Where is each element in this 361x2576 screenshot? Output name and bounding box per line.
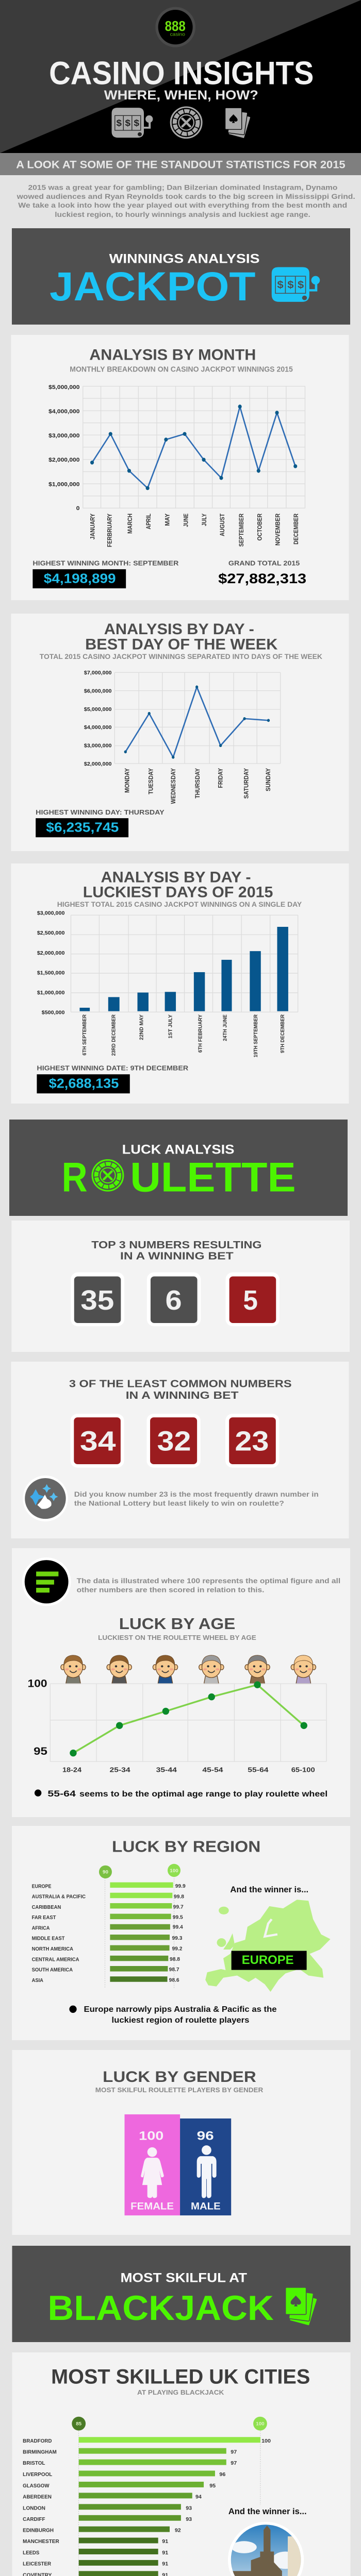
line chart: monthly winnings [48, 384, 305, 547]
line chart: monthly winnings: OCTOBER [256, 513, 264, 540]
panel: luck by region [12, 1826, 350, 2040]
bar chart: cities: EDINBURGH [23, 2528, 54, 2534]
bar chart: cities: BIRMINGHAM [23, 2450, 57, 2455]
icon: slot machine [112, 108, 153, 138]
text: data note [77, 1577, 340, 1594]
stat: highest winning date [37, 1064, 188, 1093]
bar chart: luckiest days: $1,000,000 [37, 990, 65, 996]
heading: ANALYSIS BY DAY - [101, 869, 251, 886]
line chart: monthly winnings: JANUARY [89, 514, 96, 539]
stat: highest winning date: $2,688,135 [49, 1076, 119, 1091]
chart: female column: FEMALE [130, 2201, 174, 2212]
panel: luckiest days [11, 863, 349, 1104]
bar chart: cities: 94 [195, 2495, 202, 2500]
line chart: monthly winnings: APRIL [145, 514, 152, 529]
heading: roulette: R [62, 1154, 88, 1200]
bar chart: regions: EUROPE [32, 1884, 52, 1889]
heading [85, 621, 277, 653]
line chart: day of week [84, 670, 281, 804]
number tile: 6 [147, 1273, 201, 1326]
bar chart: cities: CARDIFF [23, 2517, 45, 2522]
line chart: day of week: $6,000,000 [84, 689, 112, 694]
subtitle: WHERE, WHEN, HOW? [104, 87, 258, 103]
line chart: monthly winnings: NOVEMBER [274, 513, 281, 546]
bar chart: luckiest days: 23RD DECEMBER [111, 1014, 117, 1056]
bar chart: cities: ABERDEEN [23, 2495, 52, 2500]
bar chart: luckiest days: 9TH DECEMBER [280, 1014, 286, 1053]
line chart: day of week: $7,000,000 [84, 670, 112, 676]
subheading: MOST SKILFUL ROULETTE PLAYERS BY GENDER [95, 2086, 264, 2094]
line chart: day of week: $2,000,000 [84, 761, 112, 767]
line chart: luck by age [28, 1677, 326, 1774]
heading: blackjack: BLACKJACK [47, 2289, 274, 2328]
bar chart: cities: 93 [186, 2506, 192, 2511]
stat: grand total: $27,882,313 [218, 571, 306, 586]
bar chart: luckiest days: 6TH SEPTEMBER [82, 1014, 88, 1056]
heading: MOST SKILLED UK CITIES [51, 2365, 310, 2388]
bar chart: luckiest days: 24TH JUNE [222, 1014, 228, 1041]
panel: roulette luck by age [12, 1548, 350, 1817]
intro text [16, 184, 355, 219]
text: and the winner is: And the winner is... [230, 1885, 308, 1894]
subheading: TOTAL 2015 CASINO JACKPOT WINNINGS SEPARATED INTO DAYS OF THE WEEK [40, 653, 323, 661]
chart: male column: MALE [191, 2201, 221, 2212]
chart: female column: 100 [139, 2129, 163, 2143]
bar chart: cities: 91 [162, 2550, 168, 2556]
heading: luck analysis: LUCK ANALYSIS [122, 1142, 234, 1157]
number tile: 6: 6 [166, 1284, 182, 1316]
panel: jackpot heading [12, 228, 350, 325]
icon: playing cards [225, 108, 251, 139]
bar chart: luckiest days: 1ST JULY [168, 1014, 174, 1039]
bar chart: cities: LEEDS [23, 2550, 39, 2556]
line chart: monthly winnings: 0 [76, 505, 80, 512]
panel: top 3 numbers [11, 1221, 350, 1352]
line chart: day of week: FRIDAY [218, 768, 224, 788]
stat: highest winning date: HIGHEST WINNING DATE: 9TH DECEMBER [37, 1064, 188, 1072]
bar chart: regions: 90 [103, 1870, 108, 1875]
bar chart: cities: 91 [162, 2539, 168, 2545]
icon: green cards [286, 2287, 318, 2326]
line chart: monthly winnings: $2,000,000 [48, 456, 80, 463]
line chart: day of week: MONDAY [124, 768, 131, 793]
bar chart: luckiest days: 19TH SEPTEMBER [253, 1014, 259, 1057]
icon: green roulette wheel [92, 1160, 123, 1191]
bar chart: regions: 99.9 [175, 1884, 186, 1889]
icon: blue slot machine [272, 267, 320, 302]
number tile: 34 [71, 1414, 124, 1468]
icon: green bars [22, 1557, 71, 1606]
logo: 888 casino [155, 7, 195, 47]
text: did you know: Did you know number 23 is the most frequently drawn number in [74, 1491, 319, 1499]
bar chart: regions: 99.5 [173, 1915, 183, 1921]
bar chart: cities: 97 [231, 2450, 237, 2455]
callout: optimal age: 55-64 [47, 1788, 76, 1799]
bar chart: cities: 100 [261, 2438, 271, 2444]
bar chart: luckiest days: $2,500,000 [37, 930, 65, 936]
bar chart: cities [22, 2417, 271, 2576]
stat: highest winning month: HIGHEST WINNING MONTH: SEPTEMBER [32, 560, 179, 567]
line chart: luck by age: 25-34 [109, 1766, 130, 1774]
number tile: 34: 34 [80, 1426, 116, 1456]
intro text: wowed audiences and Ryan Reynolds took cards to the big screen in Mississippi Grind. [16, 193, 355, 201]
heading: 3 OF THE LEAST COMMON NUMBERS [69, 1378, 292, 1389]
number tile: 35: 35 [80, 1284, 114, 1316]
line chart: monthly winnings: MAY [164, 514, 171, 526]
chart: male column [180, 2119, 231, 2215]
bar chart: regions: 99.7 [173, 1905, 184, 1910]
line chart: monthly winnings: SEPTEMBER [238, 513, 245, 547]
panel: most skilled UK cities [12, 2352, 351, 2576]
bar chart: regions: SOUTH AMERICA [32, 1967, 73, 1973]
label: Europe [232, 1951, 307, 1970]
heading: roulette [62, 1154, 296, 1200]
banner: standout statistics: A LOOK AT SOME OF THE STANDOUT STATISTICS FOR 2015 [16, 158, 346, 171]
stat: highest winning day [36, 808, 165, 837]
panel: roulette heading [9, 1120, 348, 1216]
bar chart: luckiest days: 6TH FEBRUARY [198, 1014, 204, 1053]
heading: IN A WINNING BET [120, 1250, 234, 1262]
photo: Bradford city hall [228, 2522, 304, 2576]
line chart: luck by age: 95 [34, 1745, 47, 1757]
line chart: luck by age: 55-64 [248, 1766, 269, 1774]
heading: TOP 3 NUMBERS RESULTING [91, 1239, 262, 1251]
chart: female column [125, 2114, 180, 2215]
intro text: luckiest region, to hourly winnings analysis and luckiest age range. [55, 211, 310, 219]
bar chart: luckiest days [37, 911, 298, 1057]
bar chart: luckiest days: 22ND MAY [139, 1014, 145, 1040]
bar chart: regions: AUSTRALIA & PACIFIC [32, 1894, 86, 1900]
chart: male column: 96 [197, 2129, 214, 2143]
bar chart: regions: 99.2 [172, 1946, 183, 1952]
line chart: day of week: TUESDAY [148, 768, 154, 794]
line chart: luck by age: 35-44 [156, 1766, 177, 1774]
line chart: monthly winnings: $5,000,000 [48, 384, 80, 391]
bar chart: cities: MANCHESTER [23, 2539, 59, 2545]
heading: jackpot: JACKPOT [50, 264, 256, 309]
heading: ANALYSIS BY MONTH [89, 347, 256, 364]
panel: least common numbers [11, 1362, 349, 1538]
number tile: 23 [225, 1414, 279, 1468]
bar chart: regions: ASIA [32, 1977, 43, 1984]
heading: roulette: ULETTE [130, 1154, 296, 1200]
bar chart: cities: 93 [186, 2517, 192, 2522]
line chart: monthly winnings: AUGUST [219, 513, 226, 536]
bar chart: cities: LIVERPOOL [23, 2472, 53, 2478]
bar chart: regions: CENTRAL AMERICA [32, 1957, 79, 1962]
subheading: MONTHLY BREAKDOWN ON CASINO JACKPOT WINNINGS 2015 [70, 366, 293, 374]
stat: grand total [218, 560, 306, 586]
stat: highest winning month [32, 560, 179, 588]
intro text: We take a look into how the year played out with everything from the best month and [18, 202, 347, 210]
label: Europe: EUROPE [242, 1953, 294, 1967]
bar chart: regions: AFRICA [32, 1925, 50, 1931]
bar chart: cities: 92 [175, 2528, 181, 2534]
stat: highest winning day: $6,235,745 [46, 820, 119, 835]
heading: LUCK BY AGE [119, 1615, 235, 1633]
bar chart: regions: 100 [170, 1868, 178, 1874]
line chart: luck by age: 18-24 [62, 1766, 82, 1774]
line chart: day of week: SUNDAY [266, 768, 272, 791]
line chart: day of week: $4,000,000 [84, 725, 112, 731]
panel: analysis by month [11, 335, 349, 600]
line chart: day of week: WEDNESDAY [171, 768, 177, 804]
line chart: monthly winnings: $3,000,000 [48, 432, 80, 439]
subheading: HIGHEST TOTAL 2015 CASINO JACKPOT WINNINGS ON A SINGLE DAY [57, 901, 302, 909]
bar chart: regions: 98.7 [169, 1967, 179, 1973]
line chart: luck by age: 65-100 [291, 1766, 315, 1774]
callout: optimal age: seems to be the optimal age range to play roulette wheel [79, 1789, 327, 1799]
bar chart: cities: 95 [209, 2483, 216, 2489]
callout: Europe narrowly pips: Europe narrowly pips Australia & Pacific as the [84, 2005, 277, 2014]
intro text: 2015 was a great year for gambling; Dan Bilzerian dominated Instagram, Dynamo [28, 184, 338, 192]
heading [83, 869, 273, 901]
line chart: luck by age: 45-54 [202, 1766, 223, 1774]
map: Europe [205, 1900, 331, 1992]
text: and the winner is: And the winner is... [228, 2507, 307, 2516]
bar chart: cities: BRADFORD [23, 2438, 52, 2444]
icon: lottery crossed fingers [23, 1476, 68, 1521]
number tile: 23: 23 [235, 1426, 269, 1456]
line chart: luck by age: 100 [28, 1677, 47, 1690]
logo: 888 casino: 888 [165, 19, 186, 35]
bar chart: regions [32, 1864, 186, 1988]
header [0, 0, 361, 153]
line chart: day of week: $3,000,000 [84, 743, 112, 749]
panel: best day of the week [11, 614, 349, 851]
logo: 888 casino: casino [170, 32, 185, 37]
heading: LUCKIEST DAYS OF 2015 [83, 885, 273, 901]
stat: highest winning month: $4,198,899 [44, 571, 116, 586]
bar chart: luckiest days: $3,000,000 [37, 911, 65, 916]
bar chart: regions: FAR EAST [32, 1914, 56, 1921]
line chart: monthly winnings: MARCH [127, 514, 134, 534]
faces: age groups [61, 1655, 316, 1684]
heading: LUCK BY REGION [112, 1838, 260, 1855]
bar chart: luckiest days: $2,000,000 [37, 951, 65, 956]
text: did you know: the National Lottery but least likely to win on roulette? [74, 1500, 284, 1507]
line chart: day of week: SATURDAY [243, 768, 250, 799]
line chart: monthly winnings: FERBRUARY [106, 514, 113, 547]
bar chart: luckiest days: $500,000 [42, 1010, 65, 1016]
bar chart: regions: 99.3 [172, 1936, 183, 1941]
bar chart: cities: GLASGOW [23, 2483, 50, 2489]
bar chart: regions: 98.6 [169, 1978, 179, 1984]
bar chart: luckiest days: $1,500,000 [37, 971, 65, 976]
number tile: 5: 5 [243, 1284, 258, 1316]
bar chart: cities: 100 [256, 2421, 265, 2427]
bar chart: regions: 99.4 [173, 1925, 183, 1930]
line chart: day of week: THURSDAY [195, 768, 201, 799]
bar chart: regions: 98.8 [170, 1957, 180, 1962]
heading [69, 1378, 292, 1401]
title: CASINO INSIGHTS [49, 55, 314, 91]
line chart: monthly winnings: $1,000,000 [48, 481, 80, 487]
heading: BEST DAY OF THE WEEK [85, 636, 277, 653]
number tile: 32 [146, 1414, 201, 1468]
stat: grand total: GRAND TOTAL 2015 [228, 560, 300, 567]
bar chart: regions: 99.8 [174, 1894, 184, 1900]
text: data note: The data is illustrated where 100 represents the optimal figure and all [77, 1577, 340, 1585]
number tile: 5 [225, 1273, 280, 1326]
text: data note: other numbers are then scored in relation to this. [77, 1586, 264, 1594]
subheading: AT PLAYING BLACKJACK [137, 2388, 224, 2396]
icon: roulette wheel [171, 107, 202, 138]
heading: ANALYSIS BY DAY - [104, 621, 254, 638]
subheading: LUCKIEST ON THE ROULETTE WHEEL BY AGE [98, 1634, 256, 1641]
line chart: monthly winnings: JULY [201, 514, 208, 526]
bar chart: cities: 97 [231, 2461, 237, 2466]
heading: LUCK BY GENDER [103, 2068, 256, 2086]
heading: IN A WINNING BET [126, 1389, 238, 1401]
callout: Europe narrowly pips: luckiest region of roulette players [112, 2015, 249, 2025]
panel: roulette luck by gender [12, 2050, 351, 2235]
bar chart: regions: CARIBBEAN [32, 1904, 61, 1910]
number tile: 35 [71, 1273, 124, 1326]
banner: standout statistics [0, 153, 361, 175]
panel: blackjack heading [12, 2246, 351, 2342]
line chart: monthly winnings: $4,000,000 [48, 408, 80, 415]
stat: highest winning day: HIGHEST WINNING DAY: THURSDAY [36, 808, 165, 816]
heading: most skilful at: MOST SKILFUL AT [120, 2270, 247, 2285]
bar chart: regions: MIDDLE EAST [32, 1936, 65, 1941]
heading: winnings analysis: WINNINGS ANALYSIS [109, 251, 260, 266]
text: did you know [74, 1491, 319, 1507]
heading [91, 1239, 262, 1262]
bar chart: cities: BRISTOL [23, 2461, 45, 2466]
number tile: 32: 32 [157, 1426, 191, 1456]
bar chart: regions: NORTH AMERICA [32, 1946, 73, 1952]
line chart: monthly winnings: DECEMBER [293, 513, 300, 545]
bar chart: cities: 85 [76, 2421, 82, 2427]
bar chart: cities: 91 [162, 2562, 168, 2567]
bar chart: cities: LONDON [23, 2506, 45, 2511]
bar chart: cities: LEICESTER [23, 2562, 52, 2567]
line chart: monthly winnings: JUNE [183, 514, 190, 527]
callout: Europe narrowly pips [69, 2005, 277, 2025]
line chart: day of week: $5,000,000 [84, 707, 112, 713]
bar chart: cities: 96 [219, 2472, 226, 2478]
